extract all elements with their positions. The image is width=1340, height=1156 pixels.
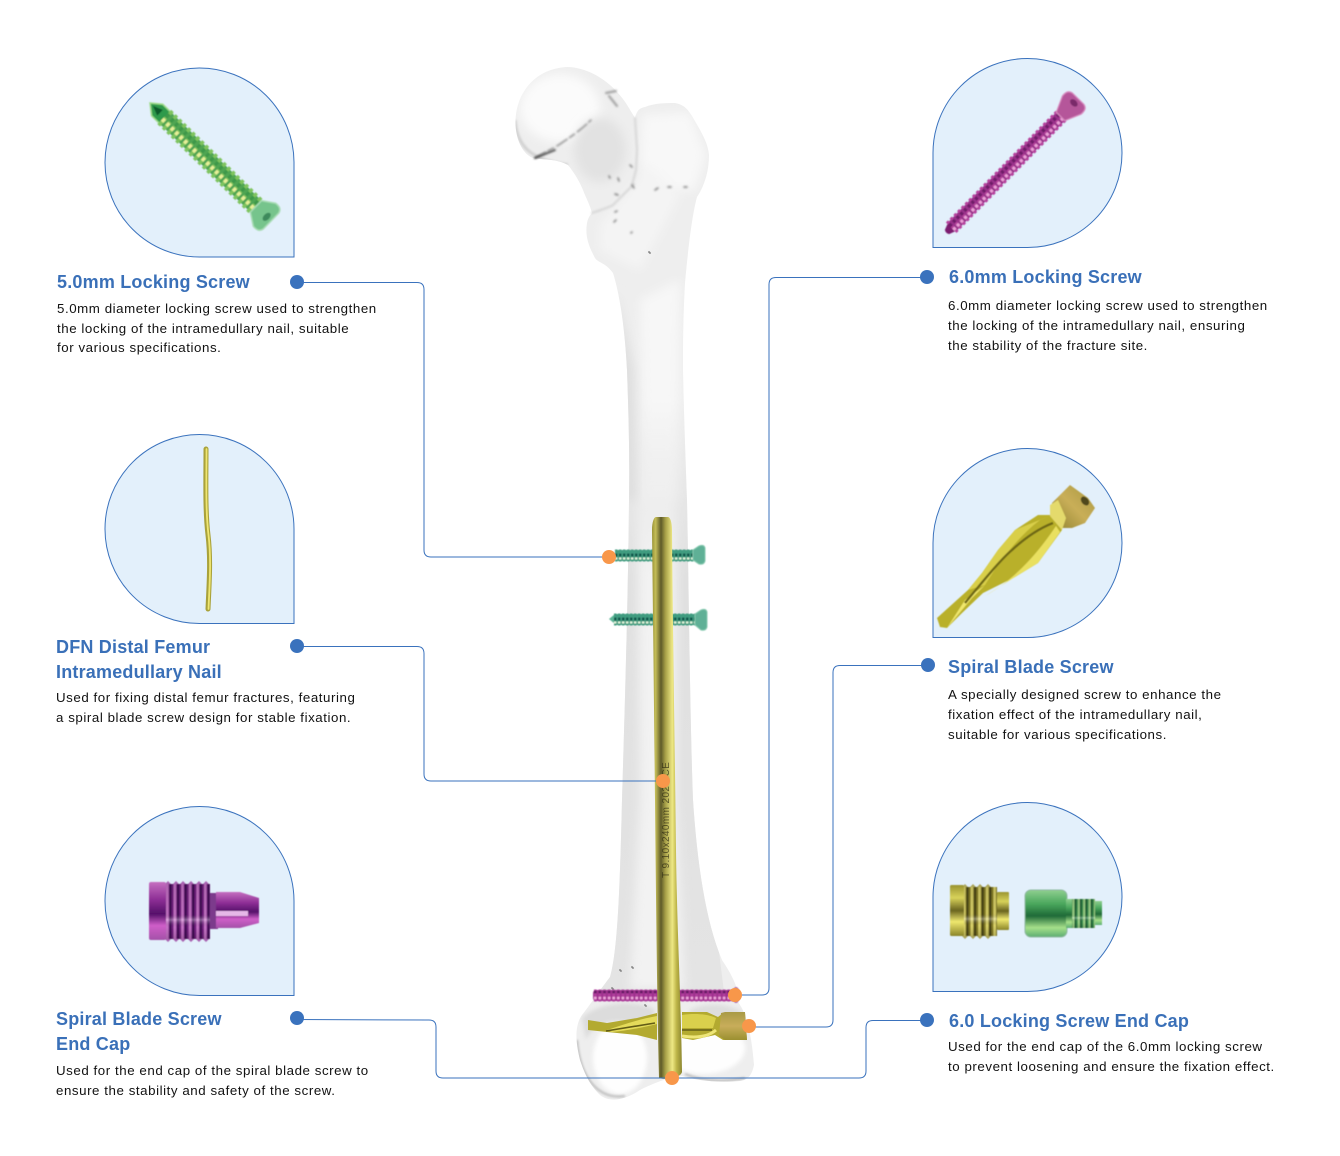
text: DFN description: a spiral blade screw design for stable fixation. [56,710,351,725]
text: end cap description [56,1063,369,1098]
text: 6.0mm description: the stability of the fracture site. [948,338,1148,353]
nail engraving: T 9.10x240mm 2024 CE [661,762,672,878]
text: 6.0mm description: the locking of the intramedullary nail, ensuring [948,318,1245,333]
panel: 6.0mm locking screw image [933,59,1122,248]
text: DFN description: Used for fixing distal femur fractures, featuring [56,690,355,705]
heading: DFN Distal Femur Intramedullary Nail [56,637,222,682]
panel: DFN nail image [105,434,294,624]
panel: 6.0 locking screw end cap image [933,802,1122,992]
icon: green 5.0mm locking screw [139,91,282,233]
text: 5.0mm description: the locking of the intramedullary nail, suitable [57,321,349,336]
text: 6.0 end cap description: to prevent loosening and ensure the fixation effect. [948,1059,1275,1074]
text: end cap description: Used for the end cap of the spiral blade screw to [56,1063,369,1078]
text: end cap description: ensure the stability and safety of the screw. [56,1083,335,1098]
text: spiral blade description: suitable for various specifications. [948,727,1167,742]
connector dots: orange implant markers [602,550,756,1085]
text: DFN description [56,690,355,725]
implant: DFN intramedullary nail [652,517,682,1079]
implant: lower green locking screw [609,609,707,630]
text: 6.0 end cap description [948,1039,1275,1074]
text: 6.0mm description [948,298,1268,353]
text: 6.0 end cap description: Used for the end cap of the 6.0mm locking screw [948,1039,1263,1054]
icon: purple spiral blade screw end cap [149,881,259,942]
text: spiral blade description [948,687,1222,742]
heading: DFN Distal Femur Intramedullary Nail: DFN Distal Femur [56,637,210,657]
bone surface crevices [535,91,687,1006]
heading: Spiral Blade Screw End Cap: Spiral Blade Screw [56,1009,222,1029]
heading: DFN Distal Femur Intramedullary Nail: Intramedullary Nail [56,662,222,682]
implant: magenta locking screw [593,987,740,1003]
text: spiral blade description: A specially designed screw to enhance the [948,687,1222,702]
text: 6.0mm description: 6.0mm diameter locking screw used to strengthen [948,298,1268,313]
text: spiral blade description: fixation effect of the intramedullary nail, [948,707,1202,722]
connector lines [297,278,928,1078]
text: 5.0mm description: 5.0mm diameter locking screw used to strengthen [57,301,377,316]
heading: Spiral Blade Screw End Cap: End Cap [56,1034,130,1054]
panel: spiral blade screw image [933,448,1122,638]
illustration: femur bone [515,67,754,1100]
icon: gold spiral blade screw [937,485,1095,628]
heading: 5.0mm Locking Screw: 5.0mm Locking Screw [57,272,250,292]
shaft shading [648,294,673,418]
icon: green end cap [1025,890,1102,937]
text: 5.0mm description [57,301,377,355]
icon: gold end cap [950,884,1009,939]
heading: 6.0mm Locking Screw: 6.0mm Locking Screw [949,267,1142,287]
implant: upper green locking screw [615,545,705,564]
heading: Spiral Blade Screw: Spiral Blade Screw [948,657,1114,677]
icon: DFN distal femur nail [206,449,210,609]
text: 5.0mm description: for various specifications. [57,340,221,355]
icon: magenta 6.0mm locking screw [937,89,1087,242]
panel: 5.0mm locking screw image [105,68,294,257]
connector dots: blue label markers [290,270,935,1027]
panel: spiral blade end cap image [105,806,294,996]
heading: Spiral Blade Screw End Cap [56,1009,222,1054]
heading: 6.0 Locking Screw End Cap: 6.0 Locking Screw End Cap [949,1011,1189,1031]
implant: spiral blade screw [588,1012,747,1040]
